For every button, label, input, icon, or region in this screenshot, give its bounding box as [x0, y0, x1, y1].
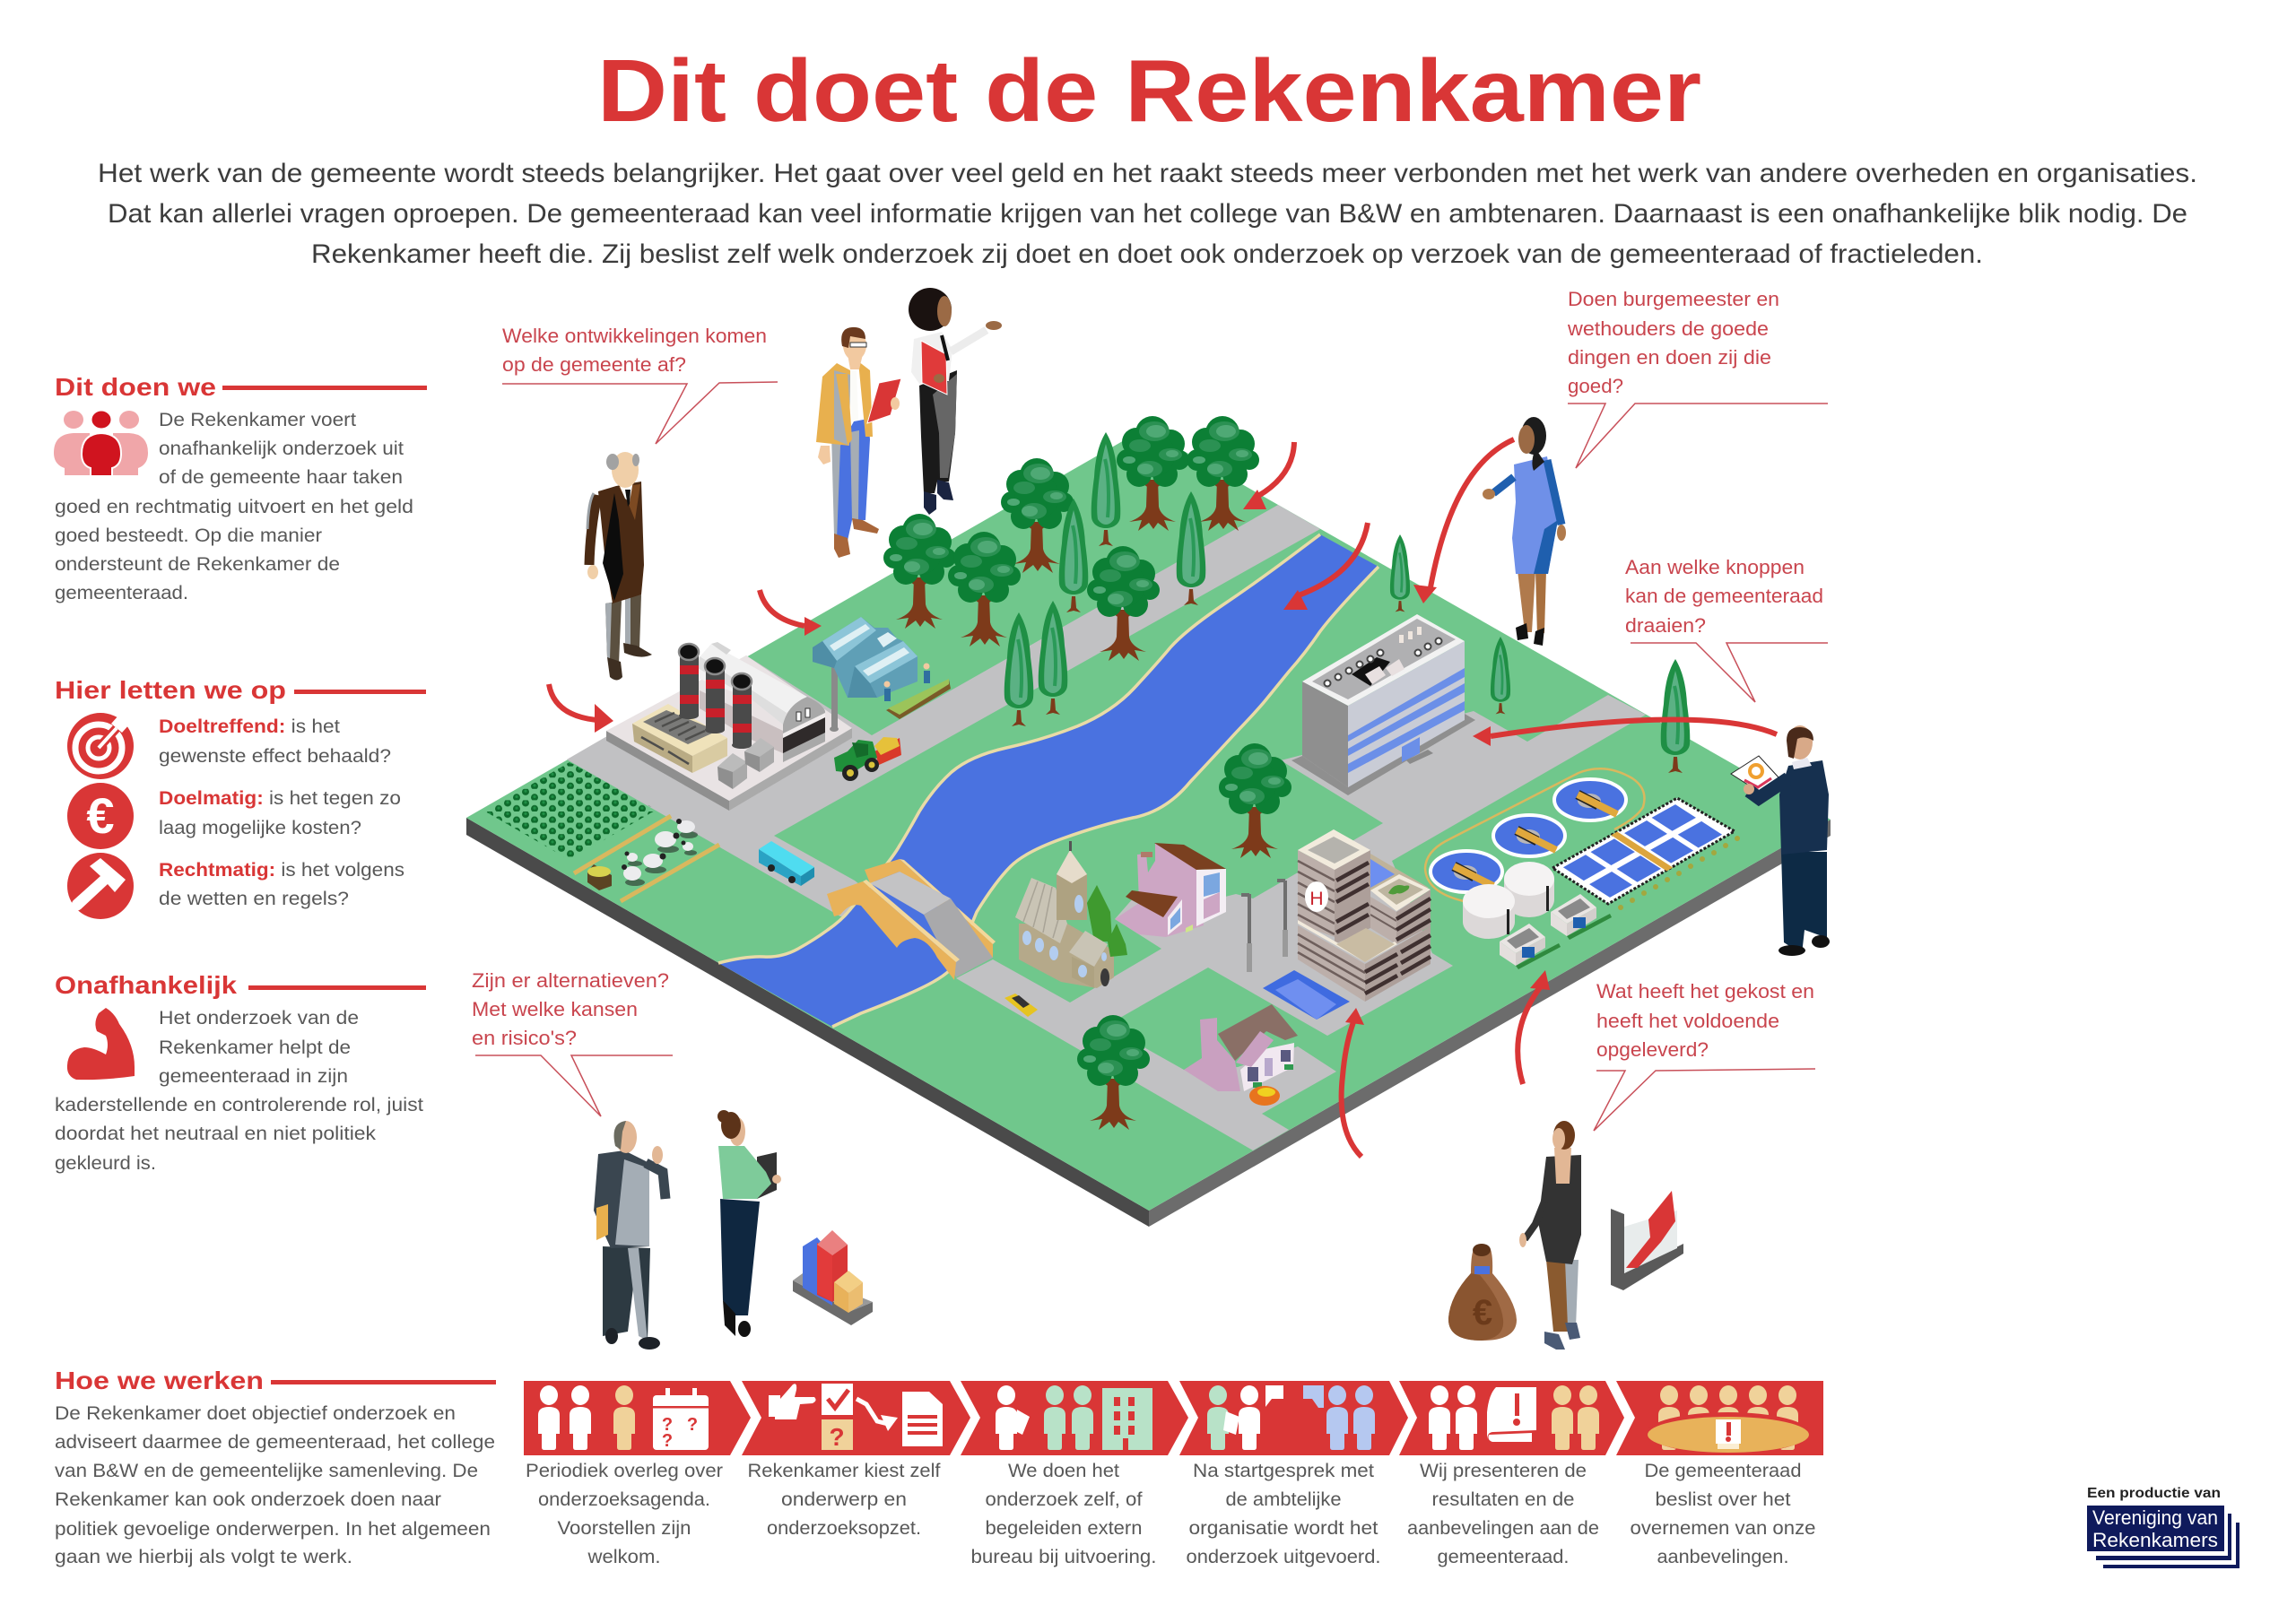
icon: startgesprek	[1207, 1385, 1375, 1450]
isometric city board	[466, 416, 1831, 1227]
chevron 4	[1179, 1381, 1408, 1455]
text: Onafhankelijk: Het onderzoek van de	[159, 1008, 359, 1028]
chevron 5	[1399, 1381, 1624, 1455]
text: Onafhankelijk: gemeenteraad in zijn	[159, 1066, 348, 1087]
icon: onderzoek	[996, 1385, 1152, 1450]
speech bubble: ontwikkelingen	[502, 325, 778, 444]
caption 5: resultaten en de	[1431, 1489, 1575, 1510]
intro paragraph: Dat kan allerlei vragen oproepen. De gemeenteraad kan veel informatie krijgen van het college van B&W en ambtenaren. Daarnaast is een onafhankelijke blik nodig. De	[108, 199, 2187, 229]
panel: Dit doen we	[54, 373, 427, 603]
speech bubble: gekost	[1594, 980, 1815, 1131]
panel: Hier letten we op	[55, 676, 426, 919]
caption 3	[970, 1461, 1157, 1567]
roads	[567, 505, 1646, 1150]
text: Hoe we werken	[55, 1403, 495, 1567]
text: Dit doen we: onafhankelijk onderzoek uit	[159, 438, 404, 459]
icon: euro	[67, 783, 134, 849]
tractor	[834, 737, 901, 781]
caption 1: Periodiek overleg over	[526, 1461, 723, 1481]
water treatment plant	[1425, 768, 1740, 969]
text: Onafhankelijk: kaderstellende en controlerende rol, juist	[55, 1095, 423, 1115]
caption 2: onderzoeksopzet.	[767, 1518, 921, 1539]
text: Dit doen we: of de gemeente haar taken	[159, 467, 403, 488]
process step 2: onderwerp kiezen	[742, 1381, 970, 1539]
figure: woman in black dress	[1519, 1121, 1581, 1350]
caption 6: beslist over het	[1656, 1489, 1791, 1510]
panel: Onafhankelijk	[55, 971, 426, 1174]
caption 2: Rekenkamer kiest zelf	[748, 1461, 941, 1481]
icon: flexed arm	[67, 1008, 135, 1080]
text: Rechtmatig: Rechtmatig: is het volgens	[159, 860, 404, 881]
bus	[759, 841, 814, 886]
house: upper pink	[1115, 843, 1226, 937]
chevron 6	[1616, 1381, 1823, 1455]
icon: gavel	[67, 853, 134, 919]
caption 3: We doen het	[1008, 1461, 1119, 1481]
speech bubble: knoppen	[1625, 556, 1828, 702]
text: Rechtmatig	[159, 860, 404, 909]
caption 3: begeleiden extern	[985, 1518, 1143, 1539]
figure: woman in white blouse	[909, 288, 1002, 515]
caption 5	[1407, 1461, 1599, 1567]
river	[718, 534, 1378, 1027]
caption 2: onderwerp en	[781, 1489, 907, 1510]
chevron 1	[524, 1381, 751, 1455]
icon: rising chart	[1611, 1191, 1683, 1290]
text: Dit doen we	[55, 410, 413, 603]
speech bubble: ontwikkelingen: op de gemeente af?	[502, 353, 686, 376]
text: Dit doen we: gemeenteraad.	[55, 583, 188, 603]
caption 5: aanbevelingen aan de	[1407, 1518, 1599, 1539]
caption 4	[1186, 1461, 1381, 1567]
intro paragraph: Het werk van de gemeente wordt steeds belangrijker. Het gaat over veel geld en het raakt steeds meer verbonden met het werk van andere overheden en organisaties.	[98, 159, 2197, 188]
text: Hoe we werken: Rekenkamer kan ook onderzoek doen naar	[55, 1489, 441, 1510]
red arrows	[549, 439, 1777, 1157]
panel: Hoe we werken	[55, 1367, 496, 1567]
house: lower pink	[1184, 1004, 1298, 1106]
speech bubble: knoppen: kan de gemeenteraad	[1625, 585, 1823, 607]
text: Doelmatig	[159, 788, 401, 838]
caption 4: onderzoek uitgevoerd.	[1186, 1547, 1381, 1567]
caption 1: welkom.	[587, 1547, 660, 1567]
text: Onafhankelijk: doordat het neutraal en niet politiek	[55, 1124, 377, 1144]
caption 6: De gemeenteraad	[1645, 1461, 1801, 1481]
text: Dit doen we: goed en rechtmatig uitvoert en het geld	[55, 497, 413, 517]
factory	[606, 642, 852, 811]
text: Rechtmatig: de wetten en regels?	[159, 889, 349, 909]
text: Doeltreffend: Doeltreffend: is het	[159, 716, 340, 737]
icon: overleg: ?	[687, 1415, 698, 1435]
caption 5: Wij presenteren de	[1420, 1461, 1587, 1481]
caption 1: Voorstellen zijn	[558, 1518, 691, 1539]
speech bubble: burgemeester en wethouders: dingen en doen zij die	[1568, 346, 1771, 369]
speech bubble: burgemeester en wethouders: wethouders de goede	[1567, 317, 1769, 340]
caption 1	[526, 1461, 723, 1567]
icon: euro: €	[86, 787, 115, 844]
hospital: H	[1309, 889, 1324, 909]
speech bubble: alternatieven: Zijn er alternatieven?	[472, 969, 669, 992]
icon: target	[67, 713, 134, 779]
pool	[1263, 970, 1350, 1020]
text: Doelmatig: laag mogelijke kosten?	[159, 818, 361, 838]
text: Hoe we werken: gaan we hierbij als volgt te werk.	[55, 1547, 352, 1567]
figure: man in brown suit	[587, 452, 652, 680]
logo: Vereniging van Rekenkamers: Vereniging van	[2092, 1506, 2218, 1529]
process step 1: overleg	[524, 1381, 751, 1567]
text: Dit doen we: De Rekenkamer voert	[159, 410, 356, 430]
speech bubble: alternatieven	[472, 969, 673, 1116]
process step 5: presenteren	[1399, 1381, 1624, 1567]
caption 1: onderzoeksagenda.	[538, 1489, 710, 1510]
bridge	[827, 859, 996, 980]
speech bubble: ontwikkelingen: Welke ontwikkelingen komen	[502, 325, 767, 347]
caption 2	[748, 1461, 941, 1539]
caption 4: de ambtelijke	[1225, 1489, 1342, 1510]
text: Dit doen we: goed besteedt. Op die manier	[55, 525, 322, 546]
figure: woman in green shirt	[718, 1110, 781, 1337]
icon: overleg	[538, 1385, 709, 1451]
icon: presenteren	[1429, 1385, 1599, 1450]
church	[1015, 841, 1127, 988]
chevron 2	[742, 1381, 970, 1455]
trees	[883, 416, 1690, 1130]
speech bubble: gekost: Wat heeft het gekost en	[1596, 980, 1814, 1002]
caption 3: bureau bij uitvoering.	[970, 1547, 1157, 1567]
text: Dit doen we: ondersteunt de Rekenkamer de	[55, 554, 340, 575]
text: Doeltreffend: gewenste effect behaald?	[159, 746, 391, 767]
icon: gemeenteraad	[1647, 1385, 1810, 1454]
text: Doelmatig: Doelmatig: is het tegen zo	[159, 788, 401, 809]
text: Hoe we werken: De Rekenkamer doet objectief onderzoek en	[55, 1403, 456, 1424]
speech bubble: burgemeester en wethouders	[1567, 288, 1828, 468]
icon: 3D bar chart	[793, 1230, 873, 1325]
logo: Vereniging van Rekenkamers	[2087, 1486, 2239, 1568]
orchard	[485, 762, 657, 860]
figure: man in navy suit with tablet	[1731, 725, 1830, 956]
icon: overleg: ?	[662, 1415, 673, 1435]
caption 5: gemeenteraad.	[1437, 1547, 1570, 1567]
title: Dit doet de Rekenkamer	[597, 41, 1701, 140]
icon: overleg: ?	[662, 1431, 673, 1451]
chevron 3	[961, 1381, 1188, 1455]
speech bubble: alternatieven: en risico's?	[472, 1027, 577, 1049]
caption 6	[1631, 1461, 1815, 1567]
process step 3: onderzoek	[961, 1381, 1188, 1567]
speech bubble: knoppen: Aan welke knoppen	[1625, 556, 1805, 578]
text: Doeltreffend	[159, 716, 391, 767]
text: Hoe we werken: politiek gevoelige onderwerpen. In het algemeen	[55, 1519, 491, 1540]
speech bubble: knoppen: draaien?	[1625, 614, 1706, 637]
heading: Dit doen we: Dit doen we	[55, 373, 216, 401]
figure: man in yellow jacket	[816, 327, 901, 558]
text: Onafhankelijk: gekleurd is.	[55, 1153, 156, 1174]
caption 4: organisatie wordt het	[1189, 1518, 1378, 1539]
caption 3: onderzoek zelf, of	[985, 1489, 1143, 1510]
caption 4: Na startgesprek met	[1193, 1461, 1374, 1481]
speech bubble: alternatieven: Met welke kansen	[472, 998, 638, 1020]
heading: Hoe we werken: Hoe we werken	[55, 1367, 264, 1394]
street lamps	[1241, 879, 1288, 972]
heading: Hier letten we op: Hier letten we op	[55, 676, 286, 704]
caption 6: overnemen van onze	[1631, 1518, 1815, 1539]
text: Onafhankelijk: Rekenkamer helpt de	[159, 1037, 351, 1058]
logo: Vereniging van Rekenkamers: Rekenkamers	[2092, 1529, 2218, 1551]
speech bubble: gekost: opgeleverd?	[1596, 1038, 1709, 1061]
speech bubble: burgemeester en wethouders: goed?	[1568, 375, 1623, 397]
icon: money bag: €	[1473, 1293, 1492, 1332]
figure: woman in blue dress	[1483, 417, 1566, 646]
text: Hoe we werken: van B&W en de gemeentelijke samenleving. De	[55, 1461, 478, 1481]
process step 4: startgesprek	[1179, 1381, 1408, 1567]
text: Hoe we werken: adviseert daarmee de gemeenteraad, het college	[55, 1432, 495, 1453]
speech bubble: gekost: heeft het voldoende	[1596, 1010, 1779, 1032]
taxi	[1004, 994, 1038, 1017]
office building	[1292, 614, 1475, 795]
heading: Onafhankelijk: Onafhankelijk	[55, 971, 237, 999]
logo: Vereniging van Rekenkamers: Een productie van	[2087, 1486, 2221, 1501]
hospital	[1298, 829, 1431, 1002]
sheep paddock	[574, 816, 719, 901]
board base	[466, 429, 1831, 1227]
intro paragraph	[98, 159, 2197, 269]
greenhouses	[813, 617, 951, 719]
process step 6: besluit	[1616, 1381, 1823, 1567]
intro paragraph: Rekenkamer heeft die. Zij beslist zelf welk onderzoek zij doet en doet ook onderzoek op verzoek van de gemeenteraad of fractieleden.	[311, 239, 1983, 269]
text: Onafhankelijk	[55, 1008, 423, 1174]
speech bubble: burgemeester en wethouders: Doen burgemeester en	[1568, 288, 1779, 310]
icon: three people	[54, 411, 148, 476]
figure: man in grey suit	[594, 1121, 665, 1350]
icon: kiezen: ?	[829, 1423, 845, 1451]
icon: money bag	[1448, 1244, 1517, 1341]
caption 6: aanbevelingen.	[1657, 1547, 1788, 1567]
icon: kiezen	[769, 1384, 943, 1451]
